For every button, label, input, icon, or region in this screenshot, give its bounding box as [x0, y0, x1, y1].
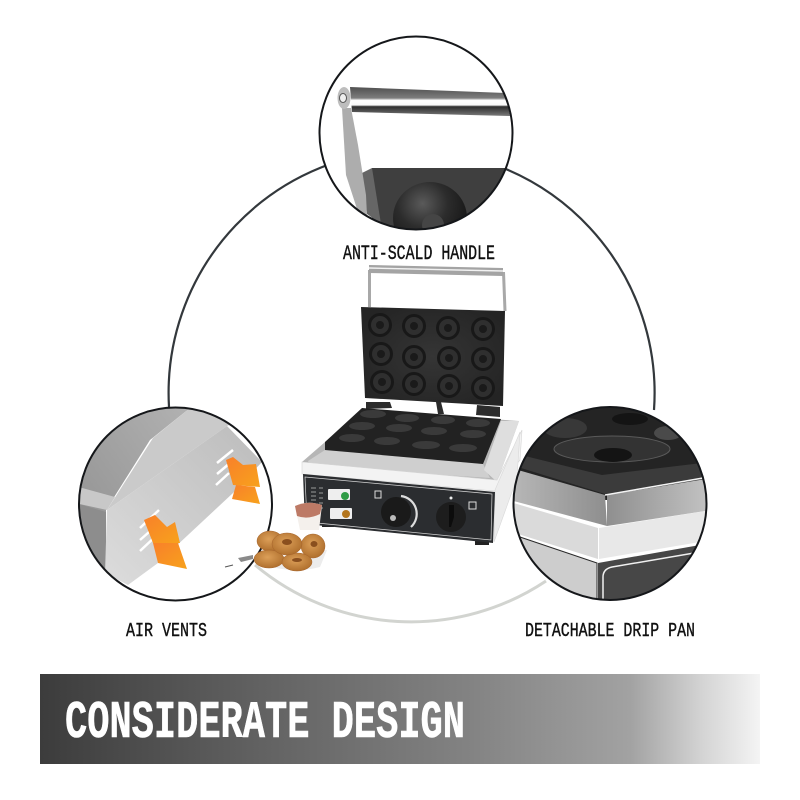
mould recesses [543, 413, 682, 462]
donuts and drink on a plate [238, 503, 327, 571]
large connecting ring: dark upper arc [169, 150, 655, 410]
hinges and support [366, 402, 500, 417]
plate bevel [362, 168, 381, 224]
plate top [520, 408, 702, 500]
donuts [254, 531, 325, 571]
handle bar [350, 87, 510, 116]
feet [322, 523, 489, 545]
waffle machine product photo [302, 265, 522, 545]
right orange arrow [226, 457, 260, 504]
upper sloping panel [108, 410, 229, 510]
right vent slots [216, 450, 233, 485]
lower body left [520, 537, 597, 605]
body top tray [302, 410, 519, 482]
large connecting ring: pale lower arc [255, 565, 546, 622]
main vent panel [105, 426, 262, 585]
indicator labels [328, 489, 352, 519]
lower baking plate [325, 408, 501, 464]
right side panel [494, 432, 520, 542]
plate edge [521, 455, 702, 494]
lower body right [598, 546, 696, 599]
mould centre [422, 214, 444, 228]
drink cup [295, 503, 322, 530]
handle arm [342, 108, 367, 216]
upper baking plate [361, 307, 505, 406]
white front lip [302, 430, 522, 491]
fork [238, 555, 253, 562]
handle [369, 265, 505, 311]
bar end cap [338, 87, 350, 109]
baking plate corner [372, 168, 505, 226]
donut mould [393, 182, 467, 228]
temperature knob [436, 496, 466, 532]
pale drip pan band [510, 502, 712, 559]
label: detachable drip pan: DETACHABLE DRIP PAN [525, 620, 695, 642]
panel trim [602, 552, 692, 599]
machine dark side [80, 408, 188, 512]
panel icon right [469, 502, 476, 509]
small utensil mark [225, 565, 233, 567]
silver band [510, 470, 712, 526]
label: air vents: AIR VENTS [126, 620, 207, 642]
front control panel [303, 474, 495, 543]
detail circle: detachable drip pan [512, 406, 708, 601]
lower shaded side [80, 504, 106, 554]
plate [254, 550, 327, 570]
side ledge [80, 488, 115, 510]
right tray edge [484, 421, 519, 482]
panel icon left [375, 491, 381, 498]
left orange arrow [144, 515, 187, 569]
indicator ticks [311, 488, 323, 508]
timer knob [381, 496, 417, 527]
detail circle: anti-scald handle [318, 36, 514, 230]
detail circle: air vents [70, 400, 272, 600]
banner [40, 674, 760, 764]
left vent slots [140, 510, 159, 551]
label: anti-scald handle: ANTI-SCALD HANDLE [343, 243, 495, 266]
tray highlight [308, 450, 490, 478]
banner title: CONSIDERATE DESIGN [65, 693, 465, 753]
